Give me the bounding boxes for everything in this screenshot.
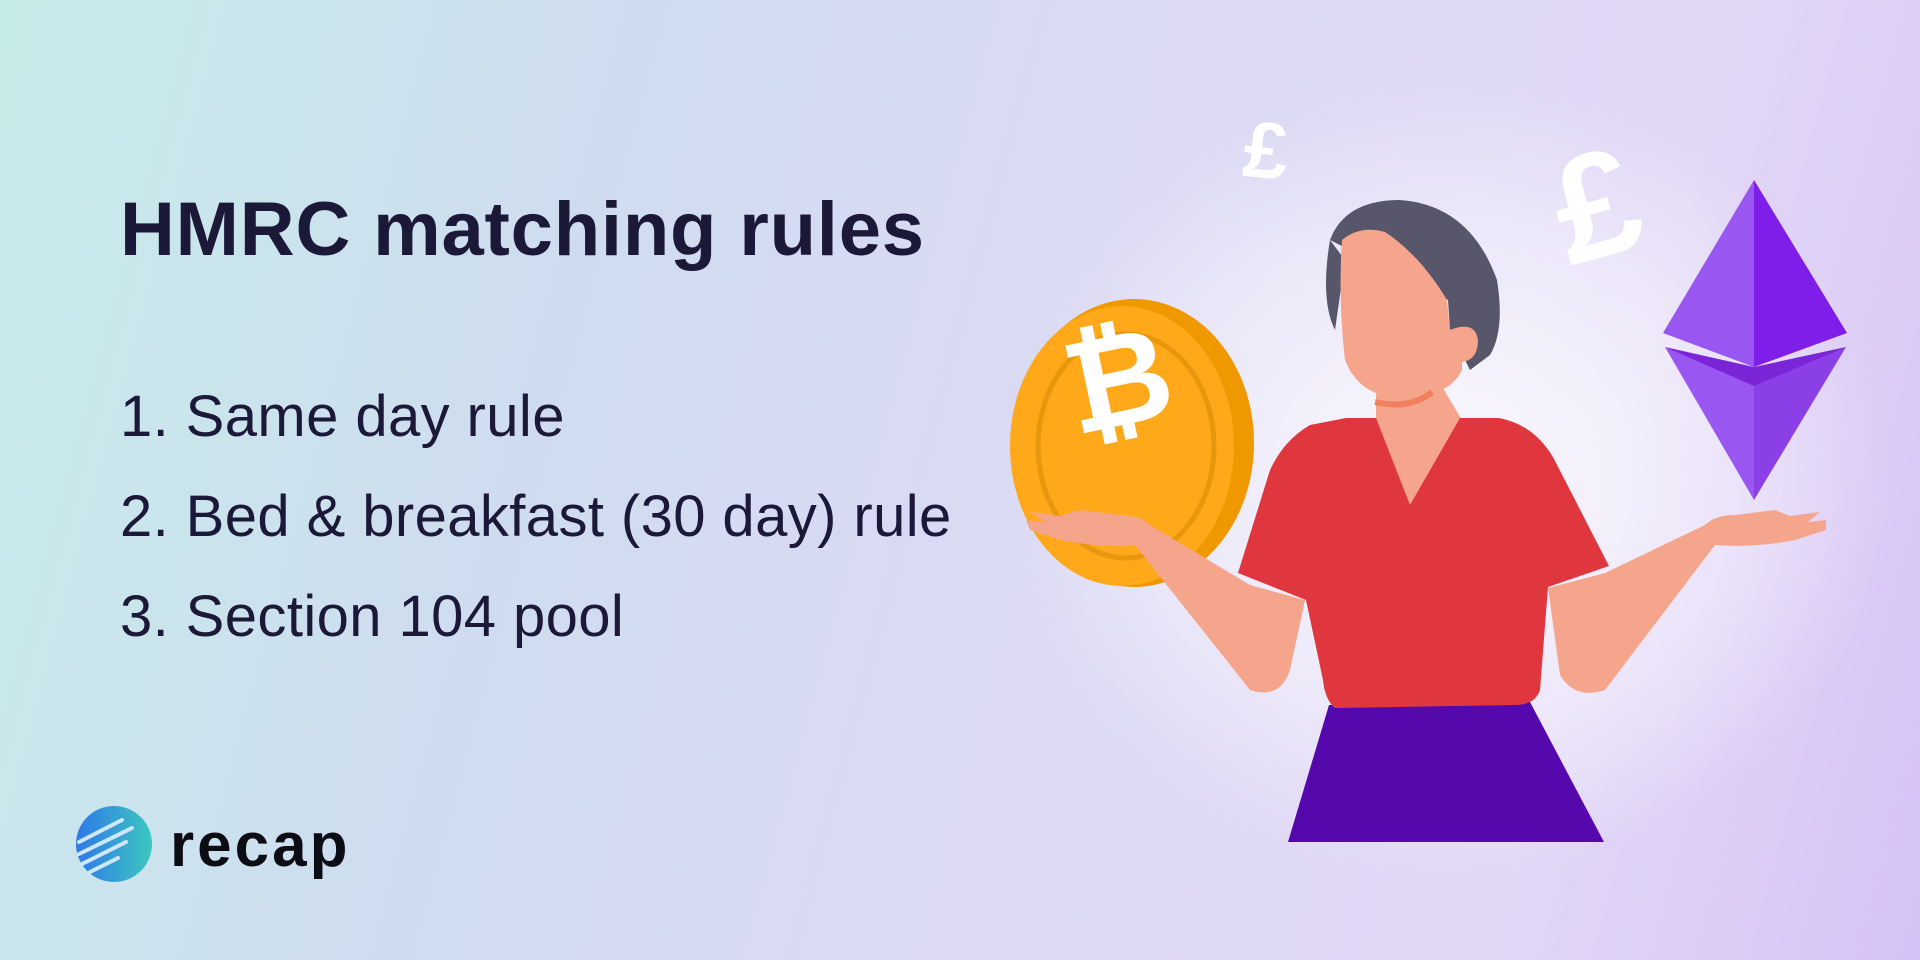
shirt (1238, 418, 1609, 708)
rule 2: 2. Bed & breakfast (30 day) rule (120, 484, 952, 549)
face (1341, 230, 1478, 398)
icon: bitcoin coin (1010, 298, 1254, 587)
skirt (1288, 702, 1604, 842)
arms (1026, 510, 1305, 692)
neck (1376, 370, 1462, 510)
icon: bitcoin coin: ₿ (1051, 298, 1185, 462)
icon: big pound: £ (1534, 113, 1658, 297)
title: HMRC matching rules (120, 187, 925, 272)
rules list (120, 384, 952, 649)
hair (1330, 200, 1500, 370)
rule 1: 1. Same day rule (120, 384, 565, 449)
icon: ethereum (1663, 180, 1847, 500)
icon: small pound: £ (1239, 104, 1293, 197)
person (1026, 200, 1826, 842)
smile (1375, 392, 1432, 404)
rule 3: 3. Section 104 pool (120, 584, 624, 649)
logo: recap (76, 806, 350, 882)
logo: recap: recap (170, 811, 350, 880)
